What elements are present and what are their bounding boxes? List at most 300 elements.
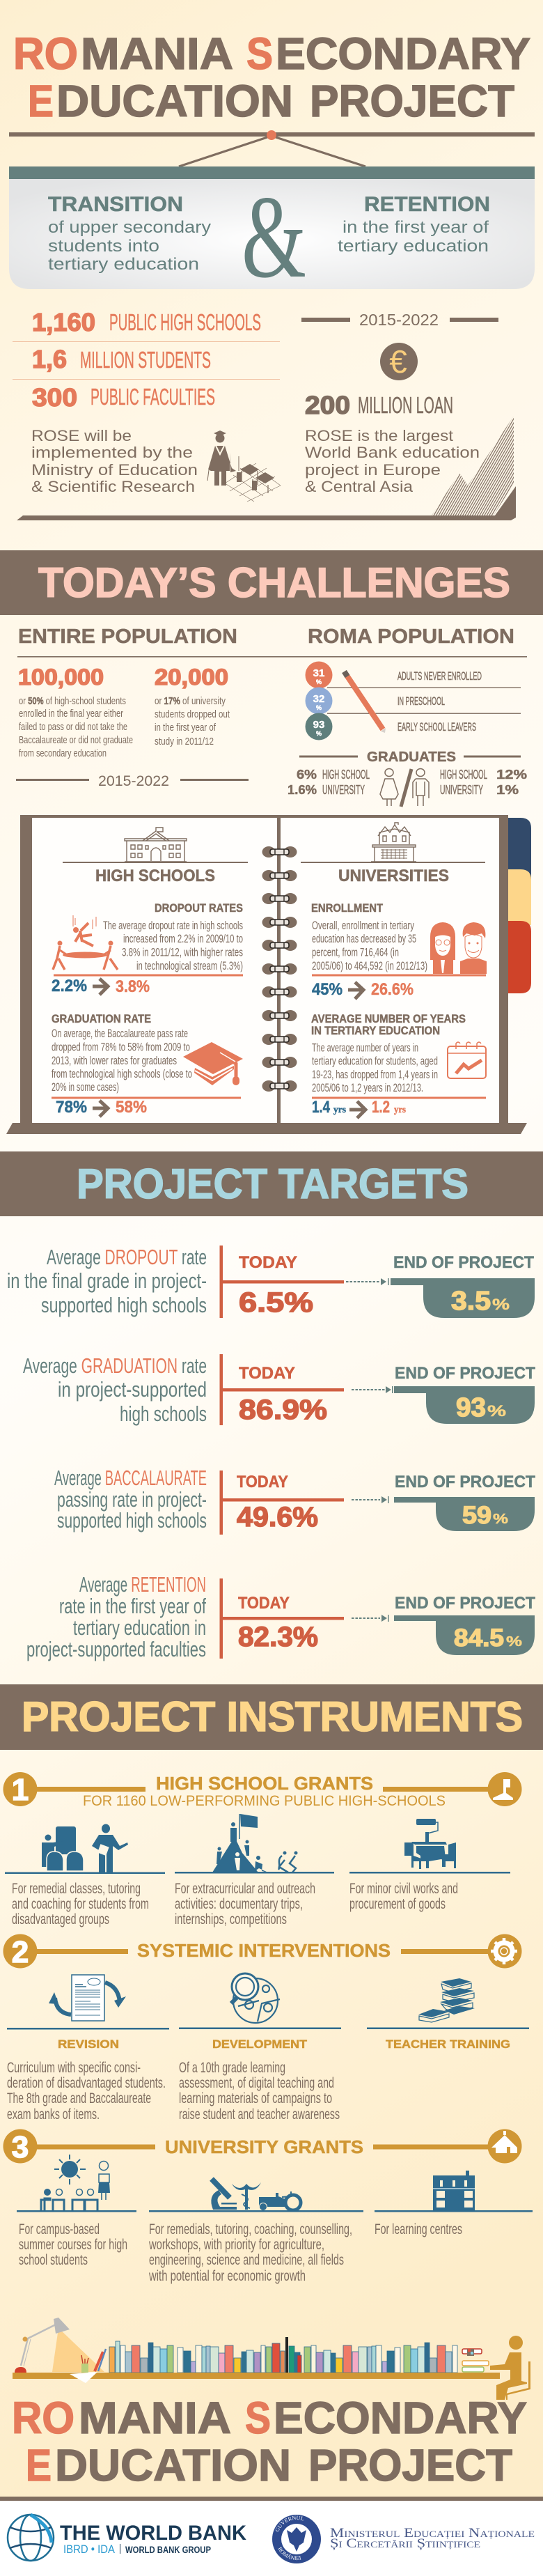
text: 3.8% in 2011/12, with higher rates [122,946,243,959]
icon: globe [8,2515,54,2561]
panel: roma population [288,626,527,807]
badge: 32%: % [316,704,322,711]
text [175,1881,315,1927]
ampersand: & [242,171,306,302]
text [12,1881,149,1927]
text: implementing ministry: Ministry of Education [31,461,198,479]
comparison: 2.2% to 3.8%: 3.8% [116,977,150,996]
dates: 2015-2022: 2015-2022 [98,773,169,789]
text: transition detail [48,218,211,274]
comparison: 1.4 yrs to 1.2 yrs: 1.2 [372,1098,390,1117]
key figures: MILLION STUDENTS [80,347,211,373]
description: Average GRADUATION rate [23,1353,207,1378]
text: raise student and teacher awareness [179,2106,340,2123]
text: For remedial classes, tutoring [12,1881,141,1897]
section band: project instruments [0,1684,543,1750]
target: retention rate [26,1572,535,1661]
student figure [490,2336,530,2400]
icon: calendar [448,1042,486,1078]
icon: microscope, caduceus, tractor [211,2179,301,2211]
text: For learning centres [375,2221,462,2237]
heading: IN TERTIARY EDUCATION [311,1024,440,1037]
closing title: E [26,2440,52,2490]
text: transition detail: of upper secondary [48,218,211,237]
closing title: PROJECT [308,2440,512,2490]
description [7,1245,207,1317]
text: high school dropouts [19,695,133,759]
title: PROJECT [310,76,514,126]
heading: universities: UNIVERSITIES [338,867,449,885]
description: Average DROPOUT rate [47,1245,207,1269]
today value [220,1246,344,1318]
description: passing rate in project- [57,1487,207,1512]
description [23,1353,207,1426]
icon: university building [371,823,416,862]
text [312,919,427,972]
text: education has decreased by 35 [312,932,416,945]
figures: male graduates [440,768,527,797]
text: transition detail: tertiary education [48,255,199,274]
title: E [28,76,54,126]
icon: hatched mountains [17,416,516,520]
end of project value: 84.5 [454,1624,504,1652]
heading: high schools: HIGH SCHOOLS [95,867,215,885]
today value: TODAY [237,1473,288,1491]
key figures: 300 [32,383,77,412]
text: largest education project: World Bank education [305,444,480,461]
icon: books [418,1978,475,2022]
description: supported high schools [41,1293,207,1317]
covers and pages [6,815,527,1134]
item: summer courses [17,2155,136,2268]
heading: graduates [299,750,521,765]
logo: romanian government seal: GUVERNUL [276,2516,304,2531]
end of project value: % [492,1296,510,1313]
title: S [246,29,273,79]
title [13,29,530,126]
end of project value: % [506,1634,522,1650]
figures: female graduates: HIGH SCHOOL [322,768,370,782]
icon: euro coin [380,343,418,380]
text [52,1027,192,1094]
text: largest education project: project in Europe [305,461,441,479]
text: Curriculum with specific consi- [7,2060,141,2076]
rule [63,862,248,863]
text: tertiary education for students, aged [312,1055,438,1068]
figures: male graduates: 1% [496,783,519,797]
badge: 93%: % [316,730,322,737]
text: For remedials, tutoring, coaching, counselling, [149,2221,352,2237]
section band: today's challenges [0,550,543,615]
arrow [352,1615,388,1622]
illustration: desk with lamp, books and student [13,2318,530,2400]
description [54,1466,207,1533]
logo: the world bank: IBRD • IDA [63,2543,116,2556]
description: rate in the first year of [59,1594,206,1618]
header: 3 [12,2130,29,2164]
block: average years in tertiary education [311,1012,486,1118]
text: learning materials of campaigns to [179,2090,332,2106]
header: UNIVERSITY GRANTS [165,2136,363,2157]
loan figure: MILLION LOAN [358,392,453,418]
text: For extracurricular and outreach [175,1881,315,1897]
dates: 2015-2022 [301,311,498,329]
logo: the world bank: WORLD BANK GROUP [125,2544,211,2555]
today value: TODAY [239,1253,297,1272]
text: largest education project: & Central Asia [305,478,414,495]
instrument 2: systemic interventions [3,1934,529,2123]
text: percent, from 716,464 (in [312,946,399,959]
block: graduation rate [52,1012,243,1117]
comparison: 45% to 26.6%: 26.6% [371,980,414,999]
end of project value [394,1473,535,1531]
row of books [109,2337,457,2373]
end of project value [391,1253,535,1318]
text: For minor civil works and [349,1881,458,1897]
description: Average RETENTION [79,1572,206,1597]
title: DUCATION [56,76,293,126]
end of project value: % [493,1512,508,1527]
today value [220,1471,344,1535]
desk lamp [15,2318,104,2373]
text: engineering, science and medicine, all fields [149,2252,344,2268]
block: enrollment [311,901,487,999]
header [3,1772,522,1809]
header: SYSTEMIC INTERVENTIONS [137,1940,391,1961]
description: Average BACCALAURATE [54,1466,207,1490]
description: in the final grade in project- [7,1268,207,1293]
text: university dropouts [155,695,230,747]
heading [311,1012,466,1037]
text: procurement of goods [349,1896,446,1912]
comparison: 1.4 yrs to 1.2 yrs: yrs [394,1105,406,1115]
text: Of a 10th grade learning [179,2060,285,2076]
text: For campus-based [19,2221,100,2237]
description: high schools [120,1402,207,1426]
text: assessment, of digital teaching and [179,2075,334,2091]
header: HIGH SCHOOL GRANTS [156,1773,373,1794]
text: ministry name: Ministerul Educației Naționale [330,2526,535,2540]
panel: transition and retention [9,166,535,302]
text: dropped from 78% to 58% from 2009 to [52,1041,190,1054]
today value: 82.3% [238,1622,318,1652]
header: FOR 1160 LOW-PERFORMING PUBLIC HIGH-SCHOOLS [83,1793,446,1809]
section band: project targets [0,1151,543,1216]
pencil cup and paper [81,2349,106,2373]
end of project value: 93 [456,1393,486,1422]
item: development [179,1973,341,2123]
text: in technological stream (5.3%) [136,959,243,972]
header: 2 [12,1935,29,1969]
comparison: 1.4 yrs to 1.2 yrs [312,1098,406,1118]
target: dropout rate [7,1245,535,1318]
text [349,1881,458,1912]
text: retention detail: in the first year of [343,218,489,237]
loan figure [305,391,453,419]
icon: falling student caught [53,915,118,970]
text: implementing ministry: & Scientific Research [31,478,195,495]
key figures: 1,6 [32,345,67,373]
comparison: 78% to 58%: 78% [56,1098,87,1117]
text: workshops, with priority for agriculture, [148,2237,324,2253]
description: tertiary education in [73,1615,206,1640]
closing title: S [245,2393,271,2443]
heading: ROMA POPULATION [308,626,514,648]
text: high school dropouts: enrolled in the final year either [19,708,123,720]
title: ECONDARY [276,29,530,79]
today value: 6.5% [239,1287,313,1318]
icon: woman and man [380,769,429,807]
stacked books and cube [462,2349,489,2372]
text: The average dropout rate in high schools [103,919,243,932]
header [3,1934,522,1969]
text: largest education project [305,427,480,495]
text: 20% in some cases) [52,1080,119,1094]
dates: 2015-2022: 2015-2022 [359,311,439,329]
panel: entire population [16,626,249,789]
heading: retention: RETENTION [364,193,490,216]
comparison: 78% to 58% [56,1098,147,1117]
hanging sign rail [9,130,535,166]
footer rule [0,2497,543,2501]
text: The 8th grade and Baccalaureate [7,2090,151,2106]
header [3,2129,522,2164]
divider under population headings [17,656,527,658]
section band: today's challenges: TODAY’S CHALLENGES [38,559,510,606]
text: ministry name: Și Cercetării Științifice [330,2536,480,2551]
today value [220,1578,344,1659]
today value: TODAY [238,1594,290,1613]
badge: 32% [305,687,333,715]
text: from technological high schools (close to [52,1067,192,1080]
item: revision [7,1975,169,2123]
comparison: 45% to 26.6% [312,980,414,999]
badge: 31%: 31 [313,667,324,679]
description [26,1572,206,1661]
heading: REVISION [58,2038,119,2051]
closing title: MANIA [79,2393,231,2443]
icon: pencil [344,672,386,733]
end of project value: END OF PROJECT [395,1594,535,1613]
heading: graduates: GRADUATES [367,750,456,765]
text: university dropouts: or 17% of university [155,695,226,707]
text: and coaching for students from [12,1896,149,1912]
text: transition detail: students into [48,237,159,256]
icon: sun, teacher and students [41,2155,110,2210]
text [103,919,243,972]
arrow [352,1496,388,1503]
figures: female graduates: UNIVERSITY [322,783,365,797]
text: 19-23, has dropped from 1,4 years in [312,1068,438,1081]
text: retention detail [338,218,489,256]
closing title: RO [12,2393,74,2443]
text: ministry name [330,2526,535,2551]
text: implementing ministry [31,427,198,495]
today value: TODAY [239,1364,295,1383]
text: increased from 2.2% in 2009/10 to [123,932,243,945]
section band: project instruments: PROJECT INSTRUMENTS [22,1693,523,1740]
text: high school dropouts: Baccalaureate or did not graduate [19,734,133,746]
rule [301,862,485,863]
text [19,2221,127,2268]
dates: 2015-2022 [16,773,249,789]
icon: document with arrows [49,1975,126,2021]
logo: romanian government seal [272,2515,321,2563]
icon: teacher and students [42,1824,128,1872]
text: retention detail: tertiary education [338,237,489,256]
notebook [6,815,531,1134]
end of project value: 59 [462,1502,491,1529]
text [148,2221,352,2284]
closing title: ECONDARY [274,2393,527,2443]
text: internships, competitions [175,1911,287,1927]
comparison: 2.2% to 3.8% [52,977,150,996]
instrument 1: high school grants [3,1772,522,1927]
icon: mortarboard [183,1042,243,1085]
figures: female graduates: 6% [297,768,317,782]
title: MANIA [81,29,233,79]
text: deration of disadvantaged students. [7,2075,166,2091]
section band: project targets: PROJECT TARGETS [77,1161,469,1207]
logo: the world bank: THE WORLD BANK [60,2522,246,2545]
figure: 100,000: 100,000 [18,665,104,690]
desk top [13,2373,500,2379]
key figures: 1,160 [32,308,95,336]
icon: graduate with desks [207,430,281,502]
text: university dropouts: study in 2011/12 [155,736,214,747]
text: largest education project: ROSE is the largest [305,427,453,444]
text: 2005/06 to 1,2 years in 2012/13. [312,1081,423,1094]
figures: male graduates: 12% [496,768,527,782]
text: implementing ministry: ROSE will be [31,427,132,444]
figures: male graduates: HIGH SCHOOL [440,768,487,782]
text: summer courses for high [19,2237,127,2253]
end of project value: END OF PROJECT [393,1253,534,1272]
item: remedial classes [5,1824,165,1927]
text [7,2060,166,2123]
block: dropout rates [52,901,243,996]
today value [220,1354,344,1425]
text: 2013, with lower rates for graduates [52,1054,177,1067]
title: RO [13,29,78,79]
labels: EARLY SCHOOL LEAVERS [398,720,476,734]
badge: 93%: 93 [313,719,324,731]
icon: mountain climbers [212,1814,298,1872]
icon: paint roller and furniture [404,1819,456,1869]
text: implementing ministry: implemented by the [31,444,193,461]
text: with potential for economic growth [148,2268,306,2284]
end of project value: END OF PROJECT [395,1473,535,1491]
text: activities: documentary trips, [175,1896,303,1912]
target: baccalaureate passing rate [54,1466,535,1535]
text: Overall, enrollment in tertiary [312,919,414,932]
logo: the world bank [8,2515,246,2561]
description: supported high schools [57,1508,207,1533]
text: The average number of years in [312,1041,418,1055]
text: school students [19,2252,88,2268]
text [312,1041,438,1094]
text: high school dropouts: failed to pass or did not take the [19,721,127,733]
item: extracurricular activities [175,1814,334,1927]
key figures: PUBLIC FACULTIES [90,384,215,410]
figure: 20,000: 20,000 [155,665,228,690]
paper sheets [70,2372,97,2383]
heading: ENTIRE POPULATION [18,626,237,648]
icon: two students [430,922,487,974]
description: in project-supported [58,1377,207,1402]
badge: 32%: 32 [313,693,324,705]
icon: magnifier and people [231,1973,280,2023]
closing title [12,2393,527,2490]
item: civil works [349,1819,510,1912]
badge: 93% [305,713,333,740]
heading: DROPOUT RATES [155,901,243,915]
key figures [13,308,280,412]
text [179,2060,340,2123]
text: 2005/06) to 464,592 (in 2012/13) [312,959,427,972]
instrument 3: university grants [3,2129,533,2284]
item: learning centres [375,2171,533,2237]
comparison: 1.4 yrs to 1.2 yrs: yrs [333,1105,347,1115]
comparison: 78% to 58%: 58% [116,1098,147,1117]
heading: GRADUATION RATE [52,1012,151,1025]
spiral rings [262,846,297,1092]
end of project value [394,1364,535,1424]
heading: DEVELOPMENT [212,2038,308,2051]
text: exam banks of items. [7,2106,100,2123]
figures: female graduates: 1.6% [288,783,317,797]
key figures: PUBLIC HIGH SCHOOLS [109,309,261,335]
text: high school dropouts: from secondary education [19,747,107,759]
labels [398,669,482,734]
text: university dropouts: in the first year of [155,722,217,734]
target: graduation rate [23,1353,535,1426]
labels: IN PRESCHOOL [398,695,445,708]
figures: male graduates: UNIVERSITY [440,783,483,797]
arrow [346,1278,388,1285]
heading: ENROLLMENT [311,901,384,915]
closing title: DUCATION [55,2440,291,2490]
end of project value: 3.5 [451,1287,491,1316]
header: 1 [12,1773,29,1807]
text: university dropouts: students dropped out [155,708,230,720]
tabs [508,818,531,993]
badge: 31% [305,662,333,688]
item: teacher training [367,1978,529,2051]
heading: AVERAGE NUMBER OF YEARS [311,1012,466,1025]
text: On average, the Baccalaureate pass rate [52,1027,188,1040]
loan figure: 200 [305,391,350,419]
text: disadvantaged groups [12,1911,109,1927]
comparison: 2.2% to 3.8%: 2.2% [52,977,87,995]
heading: transition: TRANSITION [48,193,183,216]
comparison: 1.4 yrs to 1.2 yrs: 1.4 [312,1098,330,1117]
heading: TEACHER TRAINING [386,2038,510,2051]
badge: 31%: % [316,678,322,685]
figures: female graduates [288,768,370,797]
icon: building [433,2171,475,2210]
text: high school dropouts: or 50% of high-school students [19,695,126,707]
comparison: 45% to 26.6%: 45% [312,980,343,999]
arrow [352,1386,393,1393]
icon: euro coin: € [389,343,407,380]
end of project value: % [487,1402,506,1420]
item: remedials and priority fields [148,2179,363,2284]
today value: 86.9% [239,1395,327,1425]
end of project value: END OF PROJECT [395,1364,535,1383]
today value: 49.6% [237,1502,318,1533]
description: project-supported faculties [26,1637,206,1661]
